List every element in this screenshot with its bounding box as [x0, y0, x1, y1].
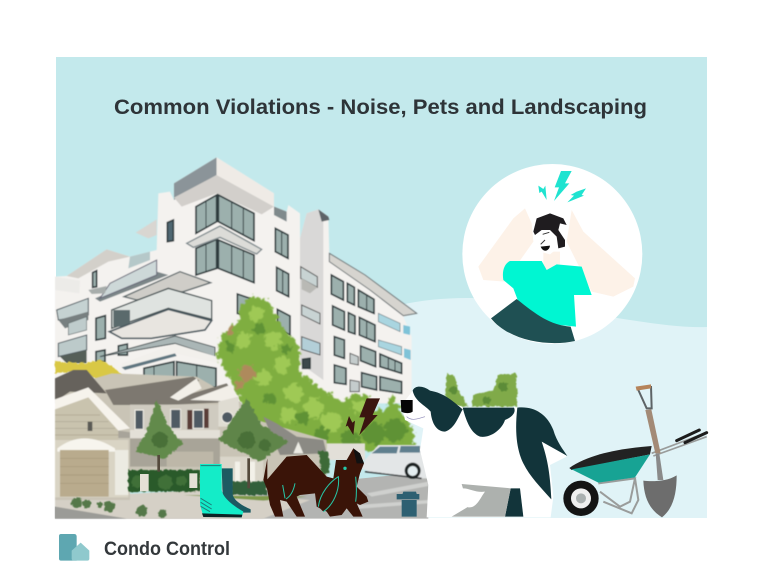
noise bolts — [538, 171, 586, 202]
photo: tree trunks and posts — [140, 455, 250, 491]
photo: houses and street — [55, 370, 428, 519]
photo: green street trees — [217, 295, 415, 450]
icon: noise lightning bolts over cat — [346, 398, 380, 435]
person head — [536, 229, 558, 254]
logo mark — [59, 534, 89, 561]
icon: fire hydrant — [397, 492, 419, 517]
photo: apartment building — [55, 157, 417, 403]
icon: wheelbarrow — [563, 430, 707, 516]
person arms — [478, 208, 533, 282]
photo: road — [55, 472, 428, 519]
background panel — [56, 57, 707, 518]
windows — [93, 195, 402, 393]
illustration: stressed person in circle — [462, 164, 642, 344]
balconies — [124, 272, 211, 300]
title: Common Violations - Noise, Pets and Landscaping — [114, 96, 647, 119]
concrete ledges — [187, 226, 262, 254]
logo wordmark: Condo Control — [104, 539, 230, 560]
window mullions — [154, 202, 395, 387]
person skirt — [491, 299, 575, 343]
background tree tops behind dog — [445, 373, 518, 407]
icon: rubber boots — [200, 464, 251, 517]
icon: shovel — [636, 384, 677, 517]
photo: shrubs and small trees — [71, 398, 330, 518]
icon: arched brown cat — [263, 448, 368, 517]
photo: yellow shrub — [55, 360, 130, 385]
logo: Condo Control — [59, 534, 230, 561]
icon: black and white dog — [401, 387, 567, 517]
person shirt — [503, 261, 592, 327]
